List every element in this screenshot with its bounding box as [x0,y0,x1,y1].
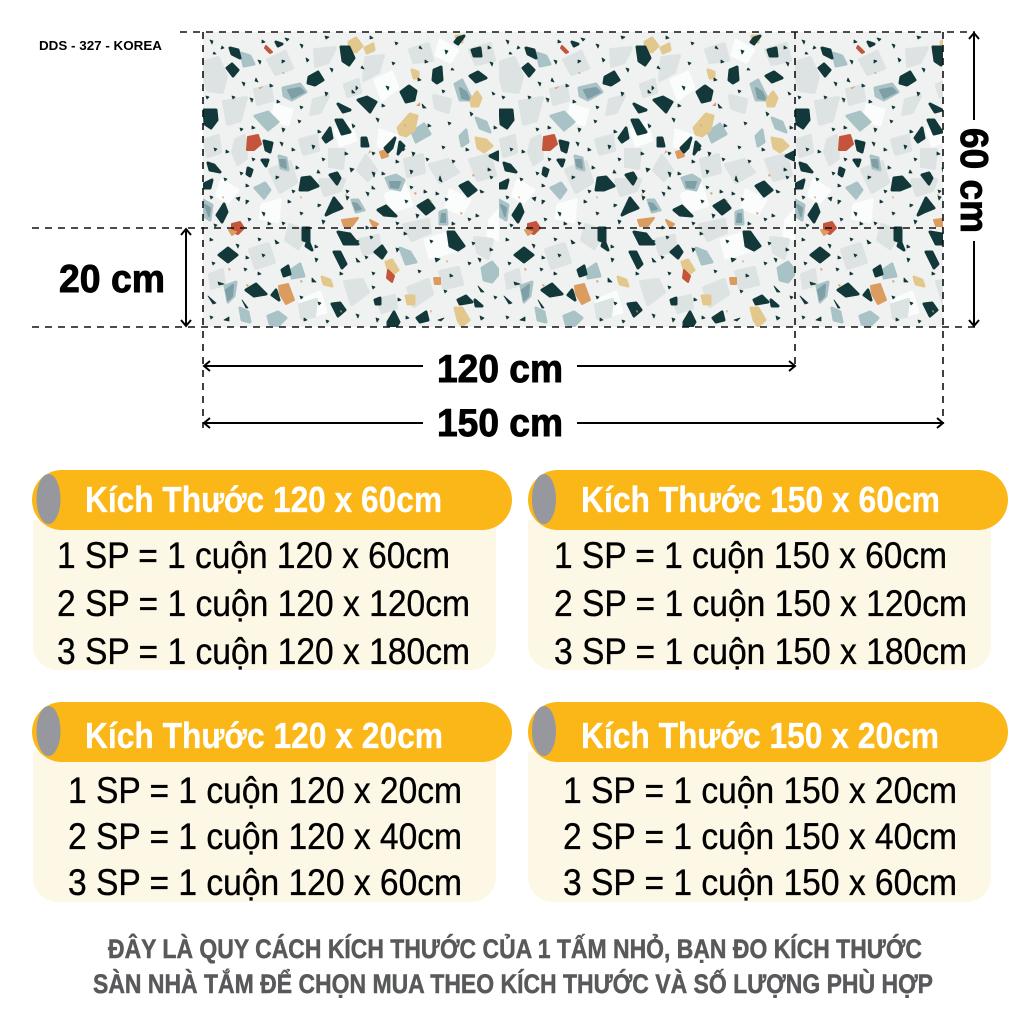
panel: size 120 x 60cm: 1 SP = 1 cuộn 120 x 60cm [57,535,450,576]
panel: size 120 x 20cm [32,702,512,903]
panel: size 150 x 60cm: 1 SP = 1 cuộn 150 x 60cm [554,535,947,576]
panel: size 120 x 60cm: 3 SP = 1 cuộn 120 x 180cm [57,631,470,672]
panel: size 150 x 20cm [528,702,1008,903]
panel: size 150 x 20cm: 3 SP = 1 cuộn 150 x 60cm [563,862,957,903]
dimension: 120 cm: 120 cm [437,348,563,391]
product code label: DDS - 327 - KOREA [39,38,163,53]
panel: size 150 x 20cm: 2 SP = 1 cuộn 150 x 40cm [563,816,957,857]
panel: size 150 x 60cm [528,470,1008,672]
footer note [93,932,933,999]
panel: size 120 x 60cm: Kích Thước 120 x 60cm [85,479,442,520]
dimension: 60 cm: 60 cm [952,128,995,233]
panel: size 120 x 20cm: 1 SP = 1 cuộn 120 x 20cm [68,770,462,811]
panel: size 120 x 20cm: Kích Thước 120 x 20cm [85,715,443,756]
panel: size 120 x 60cm [32,470,512,672]
dimension: 60 cm [952,33,995,326]
dimension: 150 cm [204,402,943,445]
panel: size 120 x 20cm: 2 SP = 1 cuộn 120 x 40cm [68,816,462,857]
panel: size 120 x 60cm: 2 SP = 1 cuộn 120 x 120cm [57,583,470,624]
panel: size 150 x 60cm: 3 SP = 1 cuộn 150 x 180cm [554,631,967,672]
panel: size 120 x 20cm: 3 SP = 1 cuộn 120 x 60cm [68,862,462,903]
panel: size 150 x 20cm: 1 SP = 1 cuộn 150 x 20cm [563,770,957,811]
dimension: 20 cm: 20 cm [59,258,165,301]
dimension: 120 cm [204,348,795,391]
panel: size 150 x 60cm: 2 SP = 1 cuộn 150 x 120cm [554,583,967,624]
dimension: 20 cm [59,229,191,326]
terrazzo texture swatch [203,32,943,327]
dimension: 150 cm: 150 cm [437,402,563,445]
panel: size 150 x 20cm: Kích Thước 150 x 20cm [581,715,939,756]
dimension guide lines [32,32,975,428]
panel: size 150 x 60cm: Kích Thước 150 x 60cm [581,479,940,520]
